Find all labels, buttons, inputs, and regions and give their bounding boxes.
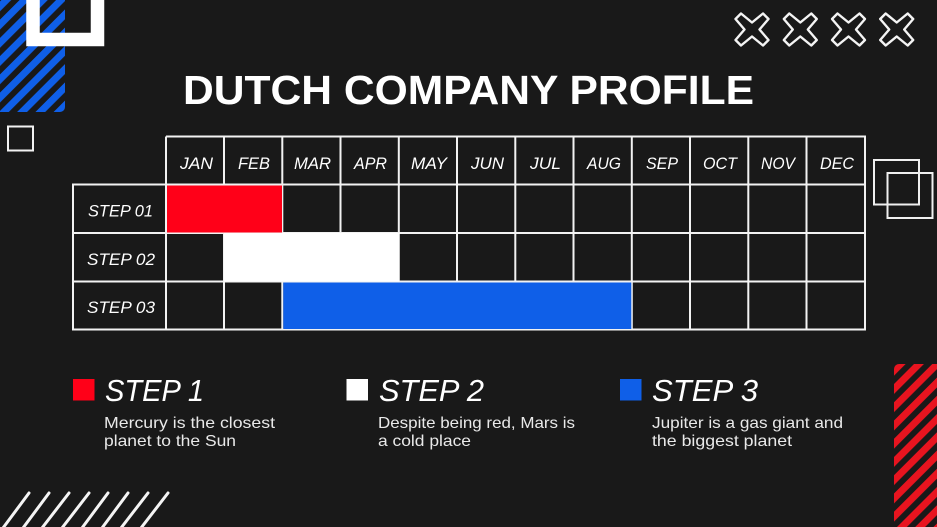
white thick square (33, 0, 98, 40)
month labels: JUL (529, 154, 561, 173)
legend: step 2 (346, 373, 575, 450)
grid lines (73, 136, 865, 330)
small outlined square (8, 126, 33, 150)
month labels (179, 154, 855, 173)
red striped block (894, 364, 937, 527)
month labels: OCT (703, 154, 739, 173)
overlapping squares (874, 160, 932, 218)
legend: step 1 (73, 373, 276, 450)
legend: step 3: STEP 3 (652, 373, 758, 408)
legend: step 1: planet to the Sun (104, 433, 236, 450)
bar: step 01 (167, 186, 282, 232)
month labels: JUN (470, 154, 505, 173)
step labels: STEP 01 (88, 202, 153, 220)
step labels: STEP 03 (87, 298, 156, 317)
step labels (87, 202, 156, 317)
legend: step 3 (620, 373, 843, 450)
blue striped block (0, 0, 65, 112)
legend: step 2: Despite being red, Mars is (378, 415, 575, 432)
month labels: MAR (294, 154, 331, 173)
legend: step 2: a cold place (378, 433, 471, 450)
month labels: APR (353, 154, 387, 173)
bar: step 03 (283, 282, 631, 329)
month labels: AUG (586, 154, 621, 173)
title: DUTCH COMPANY PROFILE (183, 67, 754, 113)
legend: step 3: Jupiter is a gas giant and (652, 415, 843, 432)
month labels: FEB (238, 154, 270, 173)
month labels: SEP (646, 154, 679, 173)
gantt chart (73, 136, 865, 330)
legend: step 3: the biggest planet (652, 433, 793, 450)
legend: step 1: STEP 1 (105, 373, 204, 408)
month labels: MAY (411, 154, 449, 173)
month labels: NOV (761, 154, 797, 173)
legend: step 1: Mercury is the closest (104, 415, 276, 432)
diagonal white lines (3, 493, 168, 527)
month labels: DEC (820, 154, 855, 173)
legend: step 2: STEP 2 (379, 373, 484, 408)
bar: step 02 (224, 233, 399, 282)
icons: four crosses (736, 14, 913, 46)
month labels: JAN (179, 154, 214, 173)
step labels: STEP 02 (87, 250, 156, 269)
